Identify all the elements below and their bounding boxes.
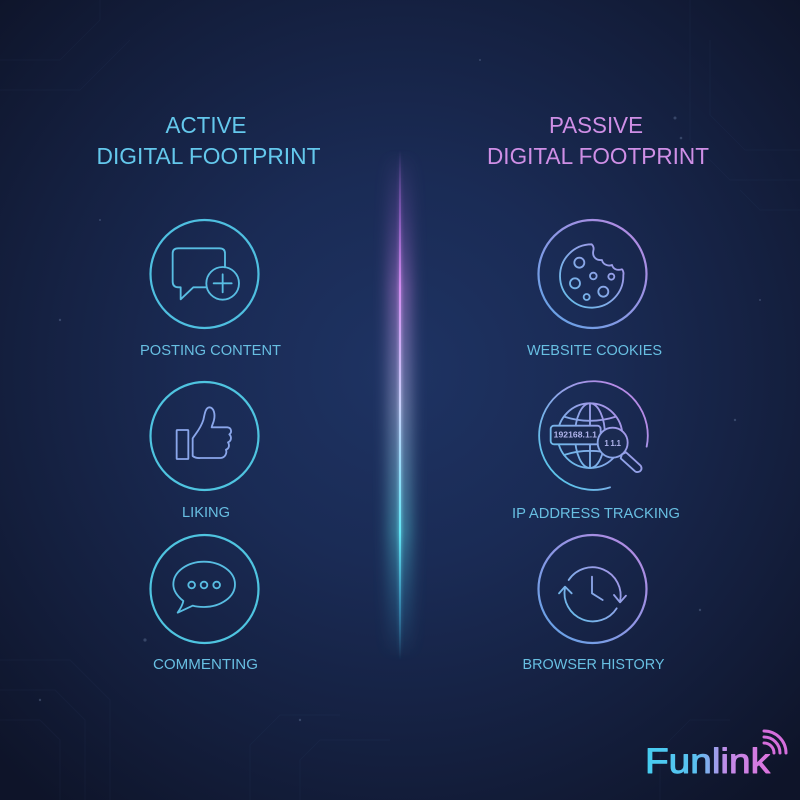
icon ring: posting content (150, 220, 258, 328)
icon: globe, IP pill and magnifier: 192168.1.1 (554, 431, 598, 440)
label: commenting: COMMENTING (153, 656, 258, 673)
background particles (39, 59, 761, 721)
item: browser history (522, 535, 664, 673)
heading: active digital footprint: DIGITAL FOOTPRINT (96, 143, 320, 169)
label: posting content: POSTING CONTENT (140, 342, 281, 359)
icon: clock with circular arrows (559, 567, 626, 621)
label: ip address tracking: IP ADDRESS TRACKING (512, 505, 680, 522)
logo signal arcs (764, 731, 786, 753)
logo: Funlink (645, 731, 786, 781)
item: website cookies (527, 220, 662, 359)
icon: thumbs up (177, 407, 231, 459)
icon ring: browser history (538, 535, 646, 643)
heading: active digital footprint (96, 112, 320, 169)
item: ip address tracking (512, 381, 680, 522)
icon: globe, IP pill and magnifier (539, 381, 648, 490)
icon ring: website cookies (538, 220, 646, 328)
central divider glowing line (390, 150, 410, 660)
heading: passive digital footprint: DIGITAL FOOTPRINT (487, 143, 709, 169)
heading: passive digital footprint: PASSIVE (549, 112, 643, 138)
label: website cookies: WEBSITE COOKIES (527, 342, 662, 359)
heading: passive digital footprint (487, 112, 709, 169)
icon: bitten cookie (560, 244, 624, 308)
logo wordmark: Funlink (645, 742, 771, 781)
item: posting content (140, 220, 281, 359)
item: liking (150, 382, 258, 521)
item: commenting (150, 535, 258, 673)
icon: speech bubble with plus (173, 248, 239, 300)
icon: globe, IP pill and magnifier: 1 1.1 (604, 439, 622, 448)
icon ring: liking (150, 382, 258, 490)
icon: comment bubble with dots (173, 562, 235, 613)
heading: active digital footprint: ACTIVE (166, 112, 246, 138)
label: liking: LIKING (182, 504, 230, 521)
label: browser history: BROWSER HISTORY (522, 656, 664, 673)
icon ring: commenting (150, 535, 258, 643)
